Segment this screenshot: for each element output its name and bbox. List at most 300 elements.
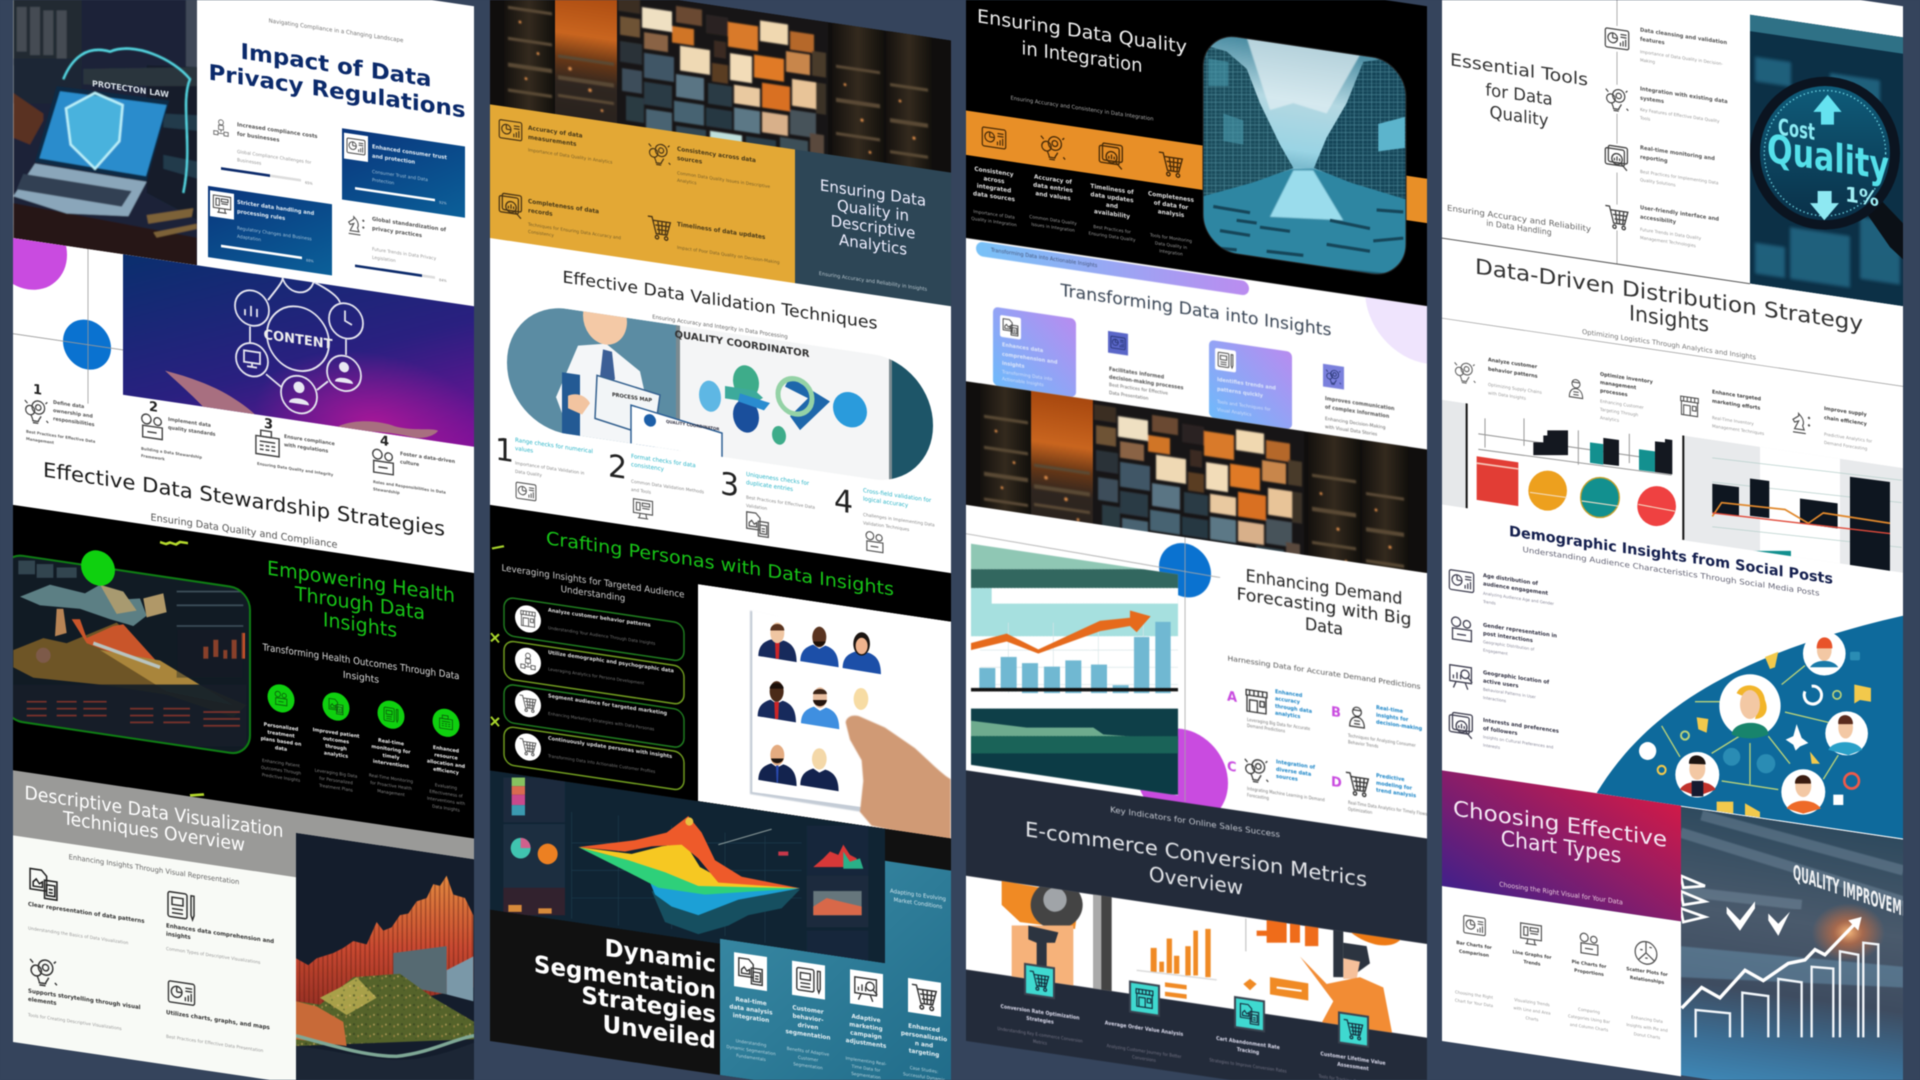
photo: persona cards and hand (698, 573, 951, 873)
item D: D (1331, 775, 1342, 792)
content cycle diagram (233, 277, 365, 416)
chart type: line: with Line and Area (1513, 1005, 1551, 1016)
step 3: Validation (746, 503, 767, 512)
item: improves communication: Improves communication (1325, 396, 1395, 413)
item: location: active users (1483, 678, 1518, 690)
persona step 1: Analyze customer behavior patterns (548, 608, 651, 629)
item 3 (1681, 385, 1765, 437)
slide: Essential Tools for Data Quality (1442, 0, 1903, 308)
column 4 (1442, 0, 1920, 1080)
metric: improved patient outcomes (313, 689, 360, 795)
card: stricter data handling: processing rules (237, 209, 285, 222)
chart type: line: Trends (1524, 959, 1541, 968)
step 1: ownership and (53, 408, 93, 420)
item: completeness (499, 193, 621, 249)
item: location: Interactions (1483, 695, 1506, 703)
step 4 (371, 434, 456, 496)
metric: personalized treatment: Personalized (264, 722, 299, 733)
panel: quality dimensions (490, 104, 795, 284)
segment 3: Adaptive (851, 1014, 881, 1024)
step 1: Importance of Data Validation in (515, 460, 585, 477)
tool 1: Data cleansing and validation (1640, 27, 1727, 46)
item labels: availability (1094, 209, 1130, 220)
item: supports storytelling: elements (28, 997, 57, 1007)
metric: personalized treatment: treatment (267, 730, 295, 740)
photo: quality magnifier (1750, 15, 1903, 308)
tool 3: Best Practices for Implementing Data (1640, 169, 1719, 187)
item sublabels: Integration (1159, 248, 1183, 258)
subtitle: Ensuring Accuracy and Consistency in Data Integration (1011, 95, 1153, 123)
item labels: Consistency (974, 167, 1014, 178)
slide: Impact of Data Privacy Regulations (13, 0, 474, 340)
title: Privacy Regulations (208, 60, 466, 124)
tool 2: Key Features of Effective Data Quality (1640, 107, 1720, 125)
panel: title: Descriptive (831, 212, 915, 243)
slide: Ensuring Data Quality in Integration (966, 0, 1427, 308)
subtitle: Understanding Audience Characteristics Through Social Media Posts (1522, 545, 1820, 598)
item: supports storytelling: Supports storytelling through visual (28, 989, 141, 1011)
icons (982, 125, 1182, 179)
item: supports storytelling (27, 957, 141, 1035)
metric: real-time monitoring: Real-Time Monitoring (369, 772, 413, 785)
item 2: Analytics (1600, 415, 1620, 424)
segment 3: Implementing Real- (845, 1055, 887, 1068)
item labels: integrated (977, 183, 1011, 195)
item: enhances comprehension: Common Types of Descriptive Visualizations (166, 946, 261, 966)
metric: average order value (1105, 977, 1183, 1067)
photo: quality magnifier: 1% (1845, 182, 1879, 211)
dashboard image (12, 550, 252, 755)
subtitle: Understanding (561, 585, 625, 604)
step 4: Stewardship (373, 486, 400, 495)
tool 4: accessibility (1640, 214, 1677, 226)
step 2: Common Data Validation Methods (631, 479, 705, 496)
metric: average order value: Conversions (1132, 1054, 1156, 1063)
card: increased compliance costs: Increased compliance costs (237, 122, 318, 140)
item: supports storytelling: Tools for Creating Descriptive Visualizations (27, 1012, 122, 1032)
step 4: Cross-field validation for (863, 488, 932, 504)
tool 1: Making (1640, 57, 1655, 66)
decorative marks (491, 544, 504, 727)
item: location (1450, 665, 1550, 710)
chart type: bar: Bar Charts for (1456, 940, 1492, 951)
item D: trend analysis (1376, 788, 1416, 800)
title: Effective Data Validation Techniques (562, 267, 877, 333)
chart type: pie: Categories Using Bar (1568, 1013, 1610, 1025)
item: gender (1452, 616, 1557, 663)
title: Empowering Health (267, 556, 455, 607)
slide: Effective Data Stewardship Strategies (12, 238, 475, 574)
slide: E-commerce Conversion Metrics Overview (966, 770, 1427, 1080)
item: timeliness (648, 216, 780, 266)
step 3: Best Practices for Effective Data (746, 495, 815, 511)
segment 1: data analysis (729, 1004, 773, 1017)
item A: A (1227, 689, 1238, 706)
metric: average order value: Average Order Value Analysis (1105, 1020, 1183, 1038)
item: timeliness: Impact of Poor Data Quality on Decision-Making (677, 245, 780, 266)
item: gender: Gender representation in (1483, 623, 1557, 640)
metric: real-time monitoring (369, 697, 413, 800)
card: enhanced consumer trust: and protection (372, 153, 415, 166)
tool 3 (1604, 140, 1719, 195)
segment 2: segmentation (785, 1029, 831, 1042)
item: completeness: records (528, 208, 553, 218)
item: clear representation (28, 868, 145, 949)
item sublabels: Issues in Integration (1031, 221, 1075, 234)
tool 4 (1604, 200, 1719, 253)
timeline divider (1616, 0, 1618, 264)
item: age: Analyzing Audience Age and Gender (1483, 591, 1554, 606)
step 4: Challenges in Implementing Data (863, 512, 935, 529)
panel: title: Quality in (837, 196, 909, 225)
card: enhances comprehension: comprehension and (1002, 351, 1058, 366)
photo: data protection law laptop (12, 0, 198, 266)
card: increased compliance costs: for businesses (237, 131, 279, 144)
segment 3: Time Data for (851, 1063, 881, 1074)
card: global standardization: Legislation (372, 255, 396, 264)
tagline pill: Transforming Data into Actionable Insights (990, 247, 1098, 269)
chart type: line: Line Graphs for (1513, 949, 1552, 961)
social network illustration (1597, 570, 1903, 885)
slide: Effective Data Validation Techniques (490, 238, 951, 575)
item A: accuracy (1275, 696, 1301, 706)
subtitle: in Data Handling (1486, 218, 1552, 237)
subtitle: Enhancing Insights Through Visual Representation (69, 853, 239, 886)
item: gender: Engagement (1483, 647, 1508, 656)
step 1: Data Quality (515, 469, 542, 479)
item: utilizes charts (166, 980, 270, 1055)
item: improves communication: with Visual Data Stories (1325, 424, 1378, 438)
item: age (1449, 568, 1554, 614)
chart type: line: Charts (1525, 1015, 1539, 1022)
item: improves communication: Enhancing Decision-Making (1325, 416, 1386, 431)
card: enhances comprehension: Transforming Data into (1001, 369, 1053, 383)
item: facilitates decisions: Facilitates informed (1109, 366, 1165, 381)
item labels: Accuracy of (1034, 174, 1072, 186)
subtitle: Harnessing Data for Accurate Demand Predictions (1227, 654, 1421, 691)
step 1: Best Practices for Effective Data (26, 429, 96, 444)
subtitle: Ensuring Accuracy and Reliability (1447, 203, 1591, 234)
item: age: Age distribution of (1483, 573, 1539, 587)
metric: cart abandonment: Cart Abandonment Rate (1216, 1036, 1281, 1051)
step 4: Foster a data-driven (400, 451, 456, 465)
steps (25, 381, 456, 505)
step 4: Roles and Responsibilities in Data (373, 479, 446, 495)
card: global standardization: Future Trends in Data Privacy (372, 246, 437, 262)
subtitle: Transforming Health Outcomes Through Data (262, 642, 460, 682)
photo: quality coordinator: QUALITY COORDINATOR (666, 419, 720, 432)
photo: server blocks (490, 0, 951, 206)
metric: personalized treatment: Outcomes Through (261, 765, 301, 777)
decorative circles (12, 237, 124, 404)
segment 1: Understanding (736, 1038, 767, 1049)
subtitle: Key Indicators for Online Sales Success (1110, 804, 1280, 839)
step 1: responsibilities (53, 416, 95, 428)
title: Enhancing Demand (1246, 566, 1402, 609)
persona step 1 (504, 597, 684, 662)
slide: Data-Driven Distribution Strategy Insights (1442, 238, 1903, 650)
step 4: culture (400, 459, 420, 468)
step 1: Range checks for numerical (515, 438, 593, 455)
title: E-commerce Conversion Metrics (1025, 817, 1367, 891)
item 4: chain efficiency (1824, 415, 1868, 428)
segment 2: Customer (798, 1055, 818, 1064)
metric: real-time monitoring: monitoring for (371, 744, 411, 756)
chart type: pie: Pie Charts for (1572, 959, 1607, 970)
item: consistency: sources (677, 156, 703, 166)
item: facilitates decisions: Best Practices for Effective (1109, 382, 1168, 397)
chart type: line: Visualizing Trends (1514, 997, 1550, 1007)
segment 4: Enhanced (908, 1023, 940, 1034)
item: interests (1449, 712, 1559, 759)
step 2: Framework (141, 453, 165, 462)
column 2 (490, 0, 951, 1080)
chart type: scatter: Relationships (1630, 975, 1664, 986)
persona step 3: Enhancing Marketing Strategies with Data Personas (548, 711, 654, 732)
card: identifies trends: patterns quickly (1217, 386, 1264, 399)
step 4: logical accuracy (863, 496, 909, 509)
item 4: Improve supply (1824, 406, 1867, 418)
title: in Integration (1021, 38, 1143, 77)
photo: quality coordinator: PROCESS MAP (612, 392, 652, 404)
card: increased compliance costs: Businesses (237, 157, 262, 167)
metric: enhanced resource allocation: Data Insights (432, 804, 461, 814)
tool 1: Importance of Data Quality in Decision- (1640, 49, 1723, 67)
item 3: Real-Time Inventory (1712, 415, 1754, 427)
step 1: 1 (33, 382, 42, 399)
tool 2: Integration with existing data (1640, 86, 1728, 105)
decorative lavender circle (1365, 226, 1489, 373)
metric: conversion rate: Understanding Key E-commerce Conversion (997, 1026, 1083, 1044)
item labels: data sources (973, 191, 1015, 204)
item 4 (1793, 401, 1872, 453)
segment 3: campaign (850, 1030, 882, 1041)
metric: personalized treatment (261, 681, 302, 784)
step 4 (834, 483, 935, 560)
tool 2: systems (1640, 96, 1664, 105)
step 4: 4 (834, 483, 853, 522)
segment 2: driven (798, 1023, 818, 1032)
process circles (733, 363, 759, 400)
segment 4 (901, 977, 947, 1080)
item: clear representation: Clear representation of data patterns (28, 902, 145, 925)
metric: cart abandonment: Tracking (1237, 1047, 1260, 1056)
metric: improved patient outcomes: through (325, 743, 347, 753)
step 3: Ensure compliance (284, 434, 335, 447)
teal panel (720, 836, 951, 1080)
item: utilizes charts: Utilizes charts, graphs, and maps (166, 1010, 270, 1031)
item: facilitates decisions: Data Presentation (1109, 390, 1149, 402)
item sublabels: Data Quality in (1155, 240, 1187, 251)
item sublabels (971, 205, 1192, 259)
item 3: Management Techniques (1712, 423, 1765, 437)
photo: 3D data mountains (296, 833, 474, 1080)
header panel (1442, 770, 1681, 921)
item: completeness: Completeness of data (528, 199, 599, 215)
metric: real-time monitoring: Management (377, 788, 405, 798)
item: interests: Interests and preferences (1483, 718, 1559, 735)
card: enhanced consumer trust: 92% (439, 201, 447, 206)
metric: improved patient outcomes: Treatment Plans (318, 783, 354, 794)
segment 3 (845, 969, 887, 1080)
step 2: Format checks for data (631, 454, 696, 469)
title: Essential Tools (1450, 49, 1588, 90)
card: enhances comprehension: Enhances data (1002, 342, 1044, 354)
item 2: Targeting Through (1599, 407, 1638, 418)
metric: enhanced resource allocation (427, 706, 466, 815)
step 2: Building a Data Stewardship (141, 446, 202, 460)
metric: conversion rate: Metrics (1033, 1039, 1047, 1046)
step 3 (720, 466, 815, 544)
card: increased compliance costs: Global Compliance Challenges for (237, 149, 311, 166)
title: Techniques Overview (62, 808, 245, 856)
segment 2: Benefits of Adaptive (787, 1046, 830, 1058)
title: Quality (1490, 101, 1548, 130)
item: accuracy: Accuracy of data (528, 126, 583, 140)
title: Transforming Data into Insights (1059, 281, 1332, 340)
persona step 2: Utilize demographic and psychographic data (548, 650, 674, 675)
segment 4: Case Studies: (910, 1065, 938, 1075)
title: Chart Types (1501, 826, 1621, 868)
title: Insights (1629, 301, 1709, 337)
photo: server blocks (966, 381, 1427, 615)
item: accuracy: measurements (528, 135, 577, 148)
item: consistency: Consistency across data (677, 147, 756, 164)
item 2: Optimize inventory (1600, 372, 1653, 386)
step 1 (24, 383, 96, 444)
item C: C (1227, 760, 1237, 776)
item sublabels: Quality in Integration (971, 216, 1017, 229)
title: Segmentation (534, 950, 716, 1005)
title: Data (1305, 614, 1343, 639)
tool 4: User-friendly interface and (1640, 205, 1719, 223)
item D: Predictive (1376, 773, 1405, 784)
metric: enhanced resource allocation: allocation and (427, 758, 466, 770)
photo label: PROTECTON LAW (92, 78, 169, 99)
step 2: 2 (149, 399, 158, 416)
item labels: Completeness (1148, 191, 1194, 204)
card: enhanced consumer trust: Consumer Trust and Data (372, 169, 428, 183)
item 2: management (1600, 380, 1637, 391)
step 4: Validation Techniques (863, 520, 910, 533)
photo: quality magnifier: Quality (1767, 126, 1889, 190)
item C: Integration of (1276, 759, 1316, 771)
item C (1227, 752, 1325, 809)
step 3: with regulations (284, 442, 328, 455)
metric: customer lifetime value (1318, 1008, 1388, 1080)
photo: content cycle and hands: CONTENT (264, 328, 332, 353)
step 2: and Tools (631, 487, 652, 496)
slide: Descriptive Data Visualization Techniques Overview (13, 770, 474, 1080)
item A: Demand Predictions (1247, 723, 1285, 734)
metric: real-time monitoring: interventions (373, 759, 409, 770)
card: identifies trends (1209, 340, 1292, 429)
item sublabels: Importance of Data (973, 209, 1015, 221)
persona step 3: Segment audience for targeted marketing (548, 693, 667, 717)
card: enhances comprehension (993, 307, 1076, 397)
metric: conversion rate: Conversion Rate Optimization (1000, 1004, 1080, 1022)
certificate (631, 405, 722, 479)
item B (1331, 698, 1422, 755)
card: identifies trends: Identifies trends and (1217, 377, 1276, 392)
chart type: scatter: Enhancing Data (1631, 1014, 1663, 1024)
persona step 1: Understanding Your Audience Through Data Insights (548, 625, 655, 646)
photo: rainbow data dashboard (490, 721, 885, 1018)
step 2: quality standards (168, 425, 216, 438)
persona step 2: Leveraging Analytics for Persona Development (548, 666, 644, 686)
metric: enhanced resource allocation: Interventions with (427, 796, 465, 807)
title: Data-Driven Distribution Strategy (1475, 254, 1863, 336)
item 1: Optimizing Supply Chains (1488, 382, 1543, 396)
subtitle: Leveraging Insights for Targeted Audience (501, 564, 685, 601)
item labels: of data for (1154, 200, 1188, 212)
item: consistency (649, 142, 770, 197)
title: Strategies (581, 981, 716, 1029)
item: timeliness: Timeliness of data updates (677, 222, 766, 241)
magnifier labels: Cost (1778, 114, 1815, 146)
persona step 2 (504, 640, 684, 705)
title: Descriptive Data Visualization (25, 783, 284, 842)
segment 3: adjustments (846, 1038, 887, 1050)
item B: Behavior Trends (1348, 739, 1378, 749)
item: consistency: Common Data Quality Issues in Descriptive (677, 170, 770, 190)
tool 3: Real-time monitoring and (1640, 145, 1715, 162)
hand (846, 715, 951, 843)
item B: Real-time (1376, 705, 1404, 715)
cartoon man (556, 286, 656, 448)
item A: analytics (1275, 711, 1300, 721)
metric: improved patient outcomes: analytics (324, 750, 348, 760)
item D: Real-Time Data Analytics for Timely Flows (1348, 800, 1427, 817)
segment 3: marketing (849, 1022, 883, 1033)
slide: Demographic Insights from Social Posts (1442, 505, 1903, 885)
subtitle: Insights (343, 670, 379, 686)
item A: Leveraging Big Data for Accurate (1247, 717, 1311, 731)
item: gender: post interactions (1483, 631, 1533, 644)
chart image (971, 512, 1179, 826)
card: enhances comprehension: Actionable Insights (1002, 376, 1044, 389)
chart type: pie: Proportions (1574, 968, 1604, 978)
step 2 (608, 449, 705, 527)
metric: customer lifetime value: Customer Lifetime Value (1320, 1051, 1386, 1067)
chart type: pie (1568, 931, 1610, 1033)
item C: Forecasting (1247, 792, 1269, 801)
slide: Ensuring Data Quality in Descriptive Analytics (490, 0, 951, 307)
magenta circle (1136, 722, 1228, 831)
step 4: 4 (380, 434, 389, 450)
chart type: pie: and Column Charts (1570, 1022, 1608, 1032)
item: age: Trends (1482, 599, 1496, 606)
title: Effective Data Stewardship Strategies (43, 458, 445, 541)
item 4: Demand Forecasting (1824, 440, 1868, 452)
card: global standardization (349, 213, 447, 283)
title: for Data (1485, 79, 1553, 109)
item labels: data updates (1090, 192, 1134, 205)
persona step 3 (504, 684, 684, 748)
item B: B (1331, 705, 1341, 721)
title: Overview (1149, 862, 1243, 900)
title: Demographic Insights from Social Posts (1509, 524, 1833, 588)
card: global standardization: 84% (439, 278, 447, 283)
item: facilitates decisions (1108, 331, 1183, 407)
charts image (1442, 335, 1903, 650)
item: improves communication: of complex information (1325, 404, 1390, 420)
column 1 (0, 0, 495, 1080)
segment 1: Fundamentals (736, 1053, 767, 1063)
card: global standardization: privacy practices (372, 226, 422, 239)
step 1: Management (26, 436, 54, 445)
item: interests: of followers (1483, 726, 1518, 737)
